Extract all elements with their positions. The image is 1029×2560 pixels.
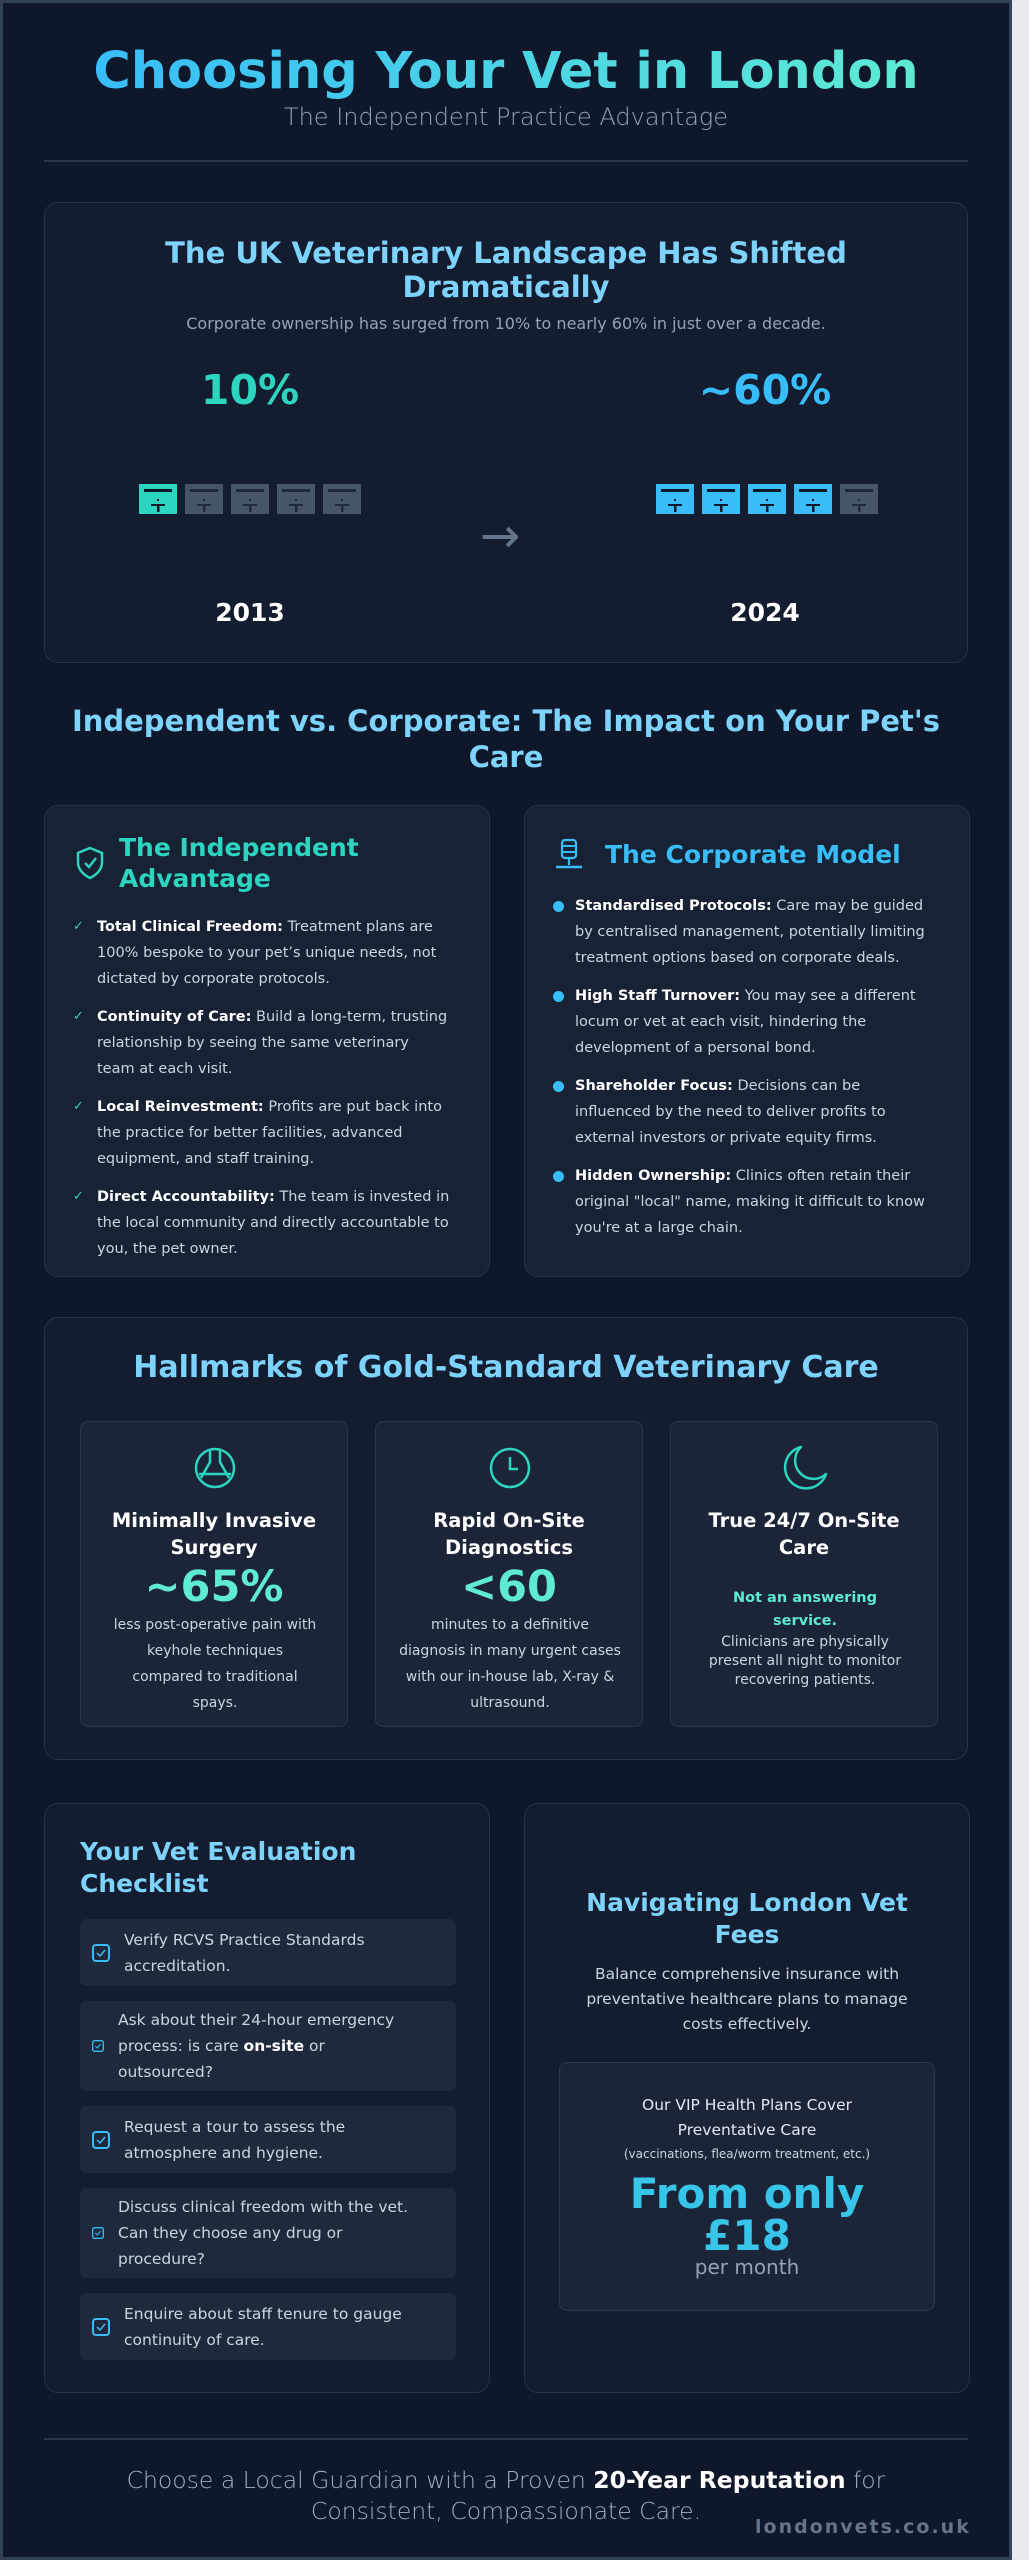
- checklist item 2: [80, 2001, 456, 2091]
- heading: independent: Advantage: [119, 864, 271, 893]
- list: independent benefits: [73, 919, 449, 1257]
- list: corporate drawbacks: [553, 898, 925, 1236]
- list: corporate drawbacks: Shareholder Focus: Decisions can be influenced by the need to deliver profits to external investors or private equity firms.: [575, 1078, 886, 1146]
- footer brand: londonvets.co.uk: [755, 2516, 971, 2538]
- section heading: comparison: Care: [469, 740, 543, 774]
- panel: hallmarks: [44, 1317, 968, 1760]
- callout: VIP plan price: Our VIP Health Plans Cover: [642, 2096, 852, 2114]
- year 2013: 2013: [215, 598, 285, 627]
- heading: checklist: Your Vet Evaluation: [80, 1837, 356, 1866]
- panel: independent advantage: ✓: [73, 1009, 84, 1024]
- heading: fees: Fees: [715, 1920, 779, 1949]
- card: diagnostics: [375, 1421, 643, 1727]
- heading: checklist: Checklist: [80, 1869, 209, 1898]
- heading: independent: The Independent: [119, 833, 359, 862]
- checklist item 1: Verify RCVS Practice Standards accreditation.: [124, 1930, 365, 1974]
- fees description: Balance comprehensive insurance with preventative healthcare plans to manage costs effectively.: [586, 1965, 908, 2033]
- checklist item 4: [80, 2188, 456, 2278]
- heading: fees: Navigating London Vet: [586, 1888, 908, 1917]
- card: surgery: less post-operative pain with keyhole techniques compared to traditional spays.: [114, 1617, 316, 1711]
- callout: VIP plan price: [559, 2062, 935, 2311]
- card: surgery: ~65%: [145, 1562, 283, 1612]
- section heading: comparison: [72, 704, 940, 774]
- checklist item 4: Discuss clinical freedom with the vet. Can they choose any drug or procedure?: [118, 2198, 408, 2268]
- heading: independent: [76, 833, 359, 893]
- panel: corporate model: [524, 805, 970, 1277]
- title: Choosing Your Vet in London: [93, 42, 919, 101]
- card: diagnostics: Rapid On-Site: [433, 1509, 585, 1532]
- card: 24/7 care: Care: [779, 1536, 829, 1559]
- panel: independent advantage: ✓: [73, 1189, 84, 1204]
- card: diagnostics: minutes to a definitive diagnosis in many urgent cases with our in-house lab, X-ray & ultrasound.: [399, 1617, 621, 1711]
- panel: landscape shift: [44, 202, 968, 663]
- checklist item 2: Ask about their 24-hour emergency process: is care on-site or outsourced?: [118, 2011, 394, 2081]
- callout: VIP plan price: per month: [695, 2255, 799, 2279]
- checklist item 5: [80, 2293, 456, 2360]
- list: corporate drawbacks: Hidden Ownership: Clinics often retain their original "local" name, making it difficult to know you're at a large chain.: [575, 1168, 925, 1236]
- list: independent benefits: Direct Accountability: The team is invested in the local community and directly accountable to you, the pet owner.: [97, 1189, 449, 1257]
- panel: fees: [524, 1803, 970, 2393]
- card: surgery: Minimally Invasive: [112, 1509, 316, 1532]
- heading: landscape: [165, 236, 847, 304]
- subtitle: The Independent Practice Advantage: [284, 103, 728, 131]
- list: independent benefits: Total Clinical Freedom: Treatment plans are 100% bespoke to your pet’s unique needs, not dictated by corporate protocols.: [97, 919, 436, 987]
- icon: clock: [490, 1448, 530, 1488]
- year 2024: 2024: [730, 598, 800, 627]
- list: corporate drawbacks: High Staff Turnover: You may see a different locum or vet at each visit, hindering the development of a personal bond.: [575, 988, 916, 1056]
- footer tagline: [127, 2466, 886, 2525]
- footer tagline: Consistent, Compassionate Care.: [311, 2497, 701, 2525]
- card: surgery: [80, 1421, 348, 1727]
- callout: VIP plan price: (vaccinations, flea/worm treatment, etc.): [624, 2147, 870, 2161]
- arrow: →: [480, 508, 520, 564]
- card: 24/7 care: Not an answering service.: [733, 1590, 877, 1629]
- icons 2024: [656, 484, 878, 514]
- list: independent benefits: Local Reinvestment: Profits are put back into the practice for better facilities, advanced equipment, and staff training.: [97, 1099, 442, 1167]
- checklist item 3: Request a tour to assess the atmosphere and hygiene.: [124, 2118, 345, 2162]
- card: 24/7 care: True 24/7 On-Site: [708, 1509, 900, 1532]
- card: diagnostics: <60: [461, 1562, 557, 1612]
- callout: VIP plan price: From only: [630, 2169, 864, 2218]
- card: surgery: Surgery: [170, 1536, 258, 1559]
- icons 2013: [139, 484, 361, 514]
- card: 24/7 care: Clinicians are physically present all night to monitor recovering patients.: [709, 1634, 901, 1688]
- icon: flask: [194, 1448, 236, 1488]
- callout: VIP plan price: £18: [703, 2211, 791, 2260]
- icon: moon: [784, 1446, 828, 1490]
- callout: VIP plan price: Preventative Care: [678, 2121, 816, 2139]
- heading: hallmarks: Hallmarks of Gold-Standard Veterinary Care: [133, 1350, 879, 1385]
- panel: checklist: [44, 1803, 490, 2393]
- heading: landscape: The UK Veterinary Landscape Has Shifted: [165, 236, 847, 270]
- panel: independent advantage: ✓: [73, 1099, 84, 1114]
- list: independent benefits: Continuity of Care: Build a long-term, trusting relationship by seeing the same veterinary team at each visit.: [97, 1009, 447, 1077]
- card: 24/7 care: [670, 1421, 938, 1727]
- heading: checklist: [80, 1837, 356, 1898]
- heading: landscape: Dramatically: [402, 270, 610, 304]
- list: corporate drawbacks: Standardised Protocols: Care may be guided by centralised management, potentially limiting treatment options based on corporate deals.: [575, 898, 925, 966]
- heading: corporate: The Corporate Model: [605, 840, 901, 869]
- heading: fees: [586, 1888, 908, 1949]
- checklist item 5: Enquire about staff tenure to gauge continuity of care.: [124, 2304, 402, 2348]
- panel: independent advantage: [44, 805, 490, 1277]
- stat 2024: ~60%: [699, 366, 831, 414]
- card: diagnostics: Diagnostics: [445, 1536, 573, 1559]
- checklist item 1: [80, 1919, 456, 1986]
- section heading: comparison: Independent vs. Corporate: The Impact on Your Pet's: [72, 704, 940, 738]
- stat 2013: 10%: [201, 366, 299, 414]
- subheading: Corporate ownership has surged from 10% to nearly 60% in just over a decade.: [186, 314, 826, 333]
- footer tagline: Choose a Local Guardian with a Proven 20-Year Reputation for: [127, 2466, 885, 2494]
- checklist item 3: [80, 2106, 456, 2173]
- panel: independent advantage: ✓: [73, 919, 84, 934]
